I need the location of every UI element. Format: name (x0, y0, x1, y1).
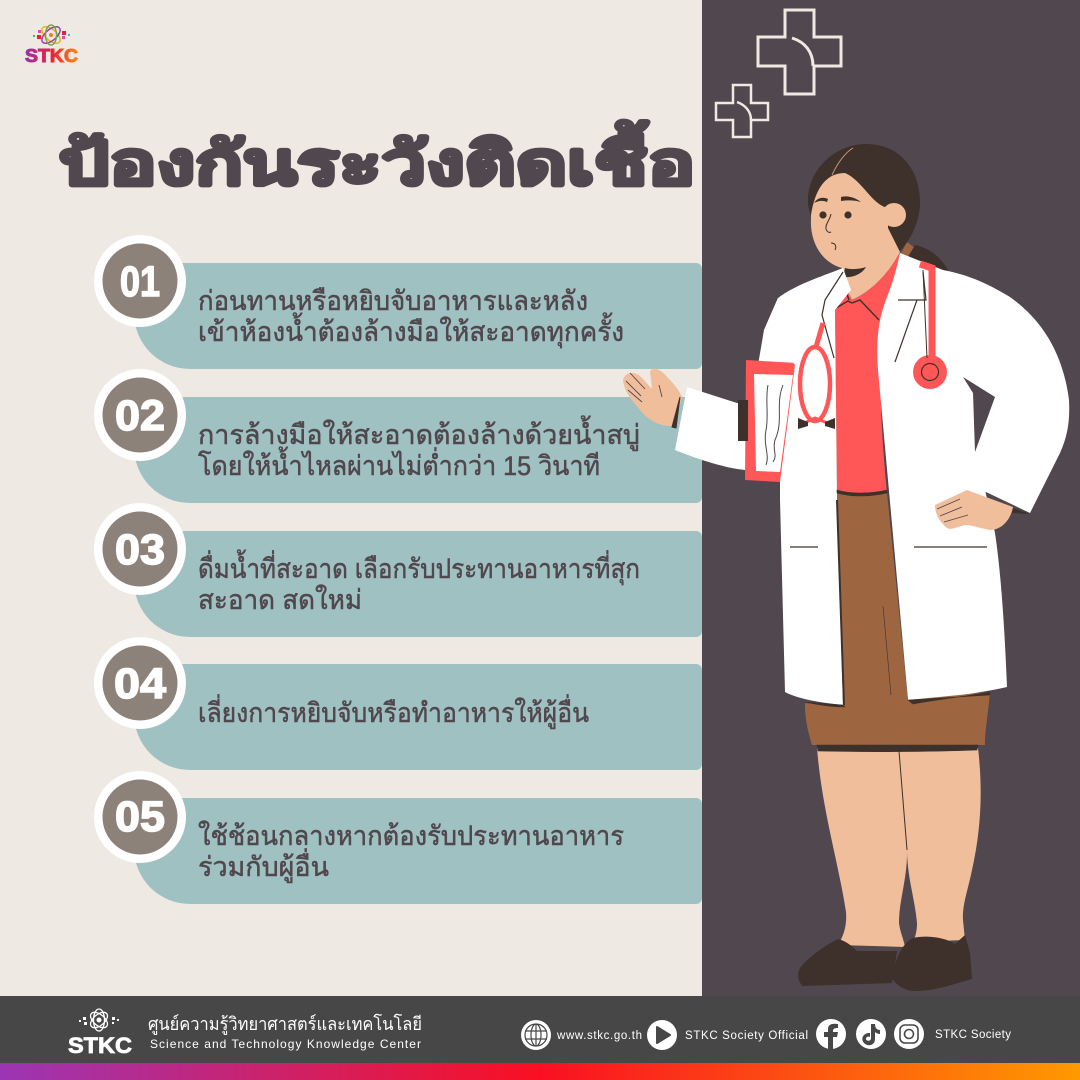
step 03: ดื่มน้ำที่สะอาด เลือกรับประทานอาหารที่สุก (198, 549, 640, 586)
step 03: สะอาด สดใหม่ (198, 584, 362, 615)
ear (882, 203, 906, 227)
icon: large medical cross (758, 10, 841, 94)
step 04: 04 (114, 660, 166, 708)
title: ป้องกันระวังติดเชื้อ (59, 120, 695, 197)
step 04 (94, 637, 702, 770)
step 01 (94, 235, 702, 369)
shirt collar lines (836, 283, 879, 320)
coat edge shadow (837, 500, 844, 705)
background left panel (0, 0, 702, 997)
icon: tiktok (856, 1019, 886, 1049)
skirt (805, 493, 990, 745)
shirt (835, 252, 903, 496)
hand on hip (935, 490, 1013, 530)
eyes, brows and mouth (814, 196, 861, 250)
organisation name English: Science and Technology Knowledge Center (150, 1037, 421, 1051)
icon: play (647, 1020, 677, 1050)
logo: STKC colour: STKC (25, 46, 78, 66)
step 03: 03 (115, 526, 165, 574)
social name: STKC Society (935, 1029, 1011, 1041)
hand: pointing (623, 369, 682, 426)
stethoscope tube shadow (923, 270, 927, 358)
coat left front (764, 268, 851, 705)
sleeve: left arm (675, 298, 800, 470)
step 03 (94, 503, 702, 637)
coat lapel lines (790, 272, 987, 547)
footer bar (0, 996, 1080, 1063)
gradient strip (0, 1063, 1080, 1080)
step 01: เข้าห้องน้ำต้องล้างมือให้สะอาดทุกครั้ง (198, 312, 624, 349)
website: www.stkc.go.th (556, 1030, 642, 1042)
footer logo: STKC (68, 1033, 132, 1058)
stethoscope (800, 264, 947, 425)
skirt shadows (805, 490, 990, 752)
youtube name: STKC Society Official (685, 1030, 808, 1042)
step 05: ร่วมกับผู้อื่น (198, 848, 329, 883)
background right dark panel (702, 0, 1080, 997)
footer logo (68, 1009, 132, 1058)
sleeve hem (1012, 508, 1030, 514)
hip hand finger lines (937, 499, 968, 522)
hair parting (832, 148, 853, 175)
step 05: 05 (115, 793, 165, 841)
sleeve band (738, 400, 748, 441)
icon: small medical cross (716, 85, 768, 137)
icon: facebook (816, 1019, 846, 1049)
step 05: ใช้ช้อนกลางหากต้องรับประทานอาหาร (198, 820, 624, 851)
step 02: โดยให้น้ำไหลผ่านไม่ต่ำกว่า 15 วินาที (198, 446, 600, 481)
ponytail (900, 242, 949, 272)
hair (808, 144, 920, 253)
illustration: doctor (623, 144, 1069, 991)
icon: globe (521, 1020, 551, 1050)
cuff shadow (672, 397, 680, 428)
icon: instagram (894, 1019, 924, 1049)
shoes (798, 935, 972, 991)
step 02: การล้างมือให้สะอาดต้องล้างด้วยน้ำสบู่ (198, 415, 640, 451)
step 02: 02 (115, 392, 165, 440)
finger lines (626, 373, 662, 402)
stethoscope ear tips (798, 418, 835, 429)
gap between arm and body (963, 377, 995, 452)
step 01: 01 (120, 258, 160, 306)
coat right front and arm (877, 253, 1069, 700)
face and neck (811, 173, 900, 300)
organisation name Thai: ศูนย์ความรู้วิทยาศาสตร์และเทคโนโลยี (148, 1013, 422, 1035)
logo: STKC colour (25, 24, 78, 66)
step 05 (94, 771, 702, 904)
step 02 (94, 369, 702, 503)
line between legs (899, 751, 907, 850)
clipboard (745, 360, 797, 482)
step 04: เลี่ยงการหยิบจับหรือทำอาหารให้ผู้อื่น (198, 694, 589, 729)
legs (817, 748, 981, 947)
chin shadow (843, 267, 866, 277)
step 01: ก่อนทานหรือหยิบจับอาหารและหลัง (198, 286, 588, 316)
